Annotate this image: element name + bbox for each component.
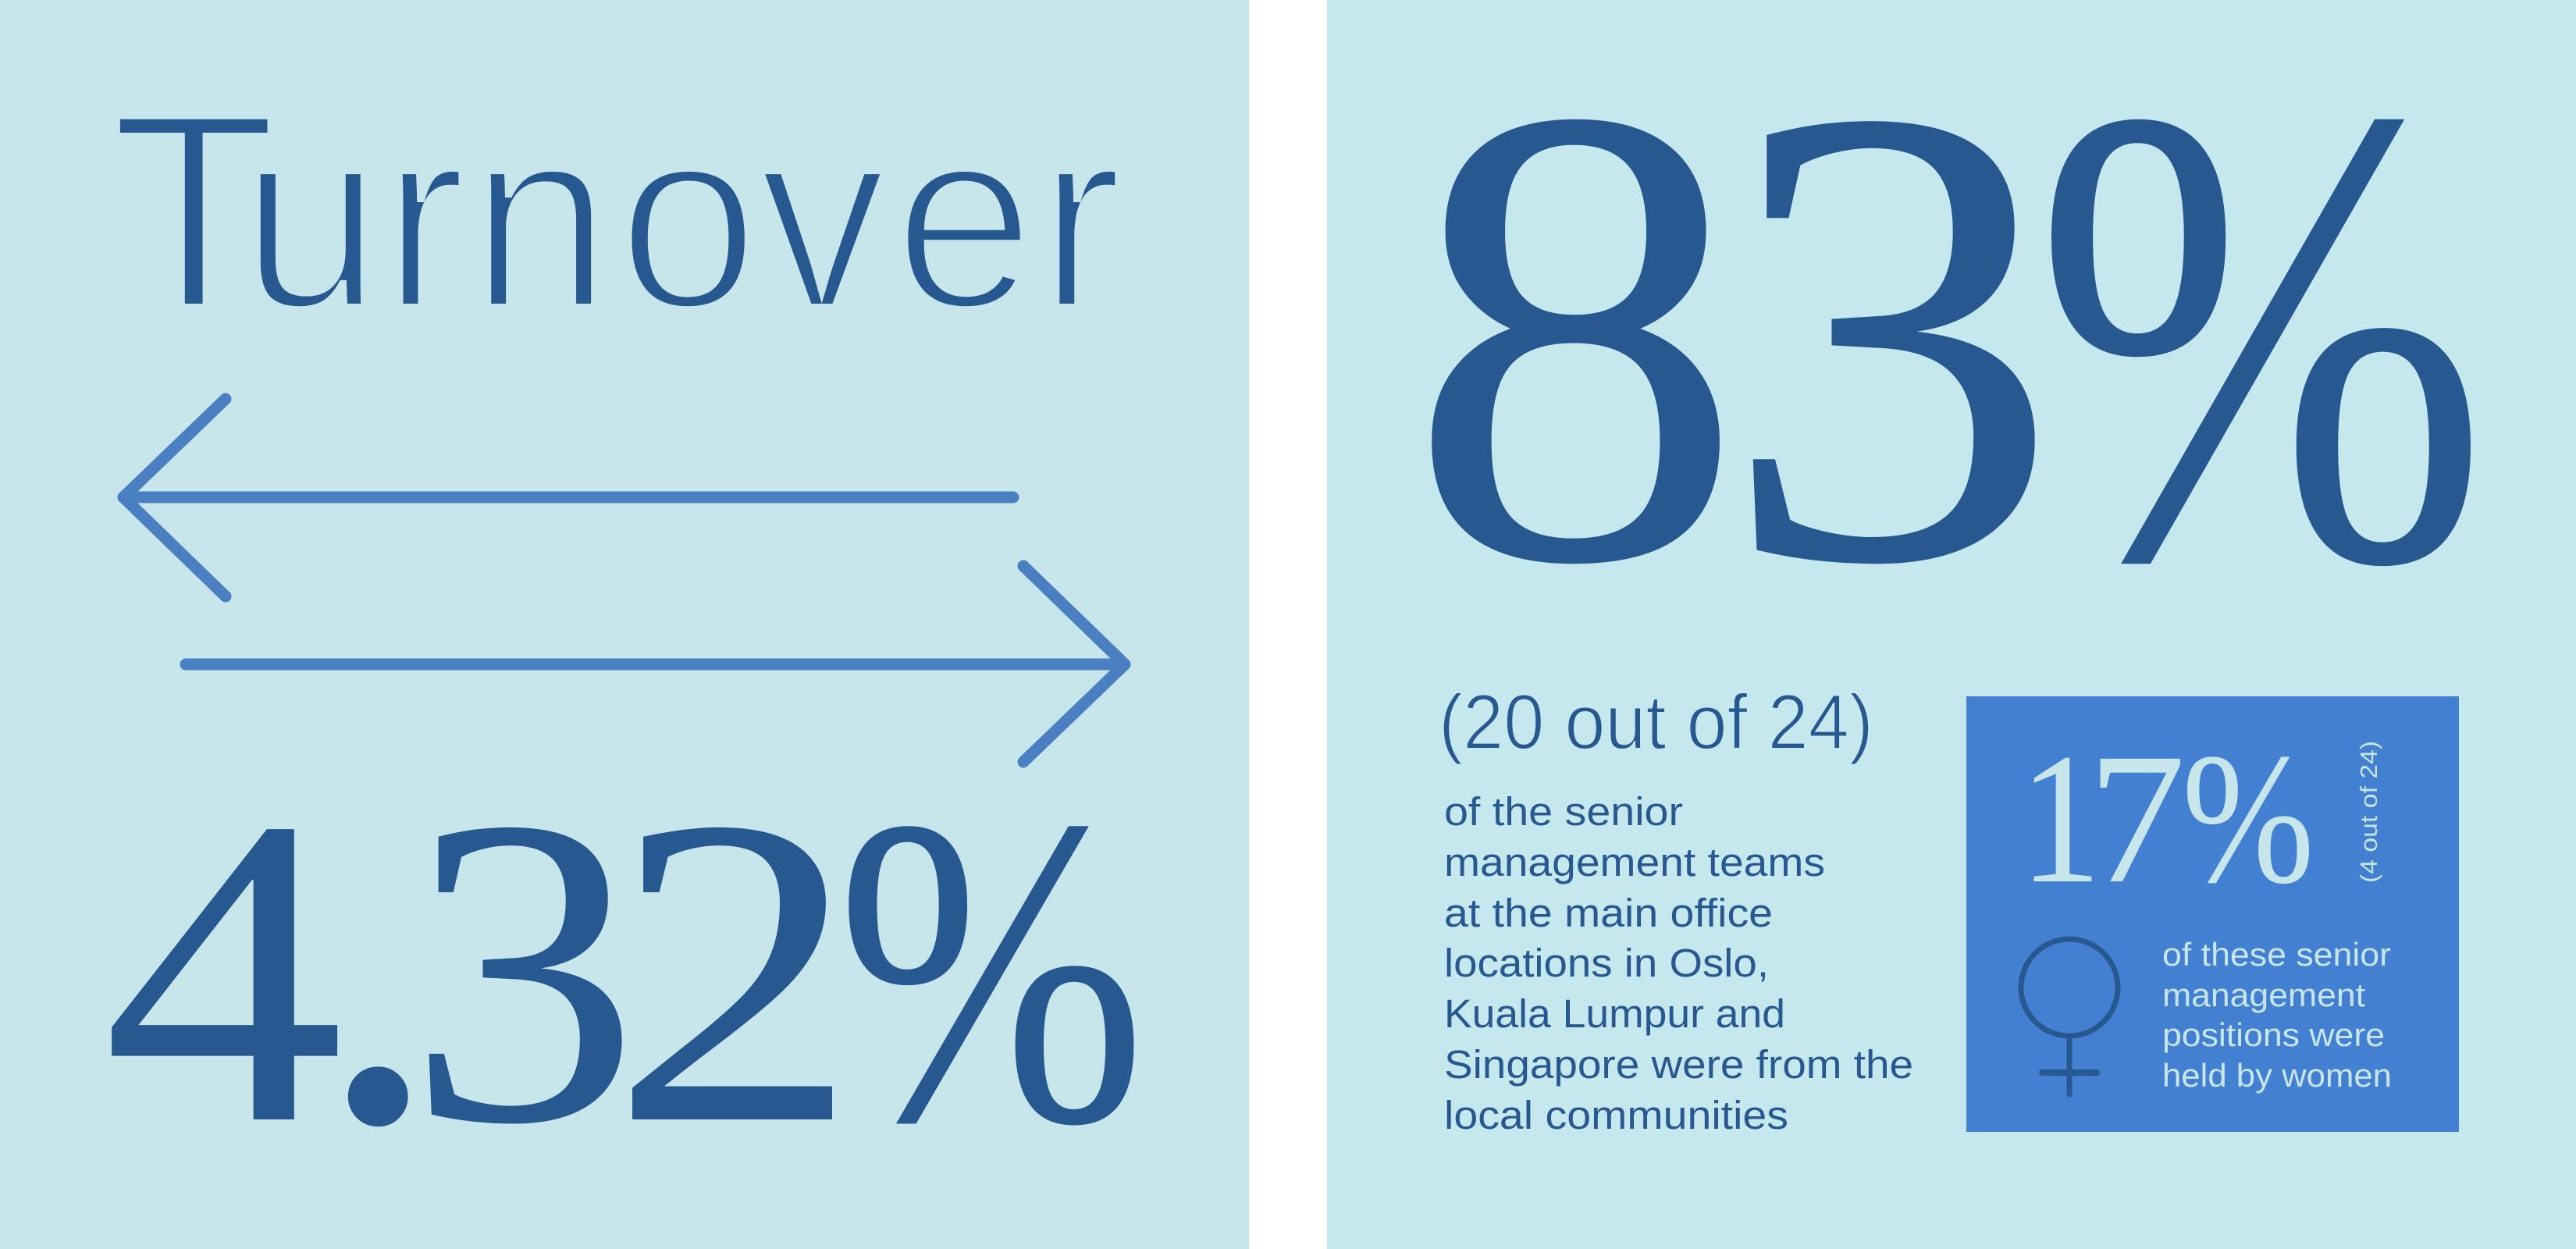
text: women description: positions were	[2162, 1016, 2385, 1053]
figure: 17%	[2019, 714, 2314, 923]
panel: turnover	[0, 0, 1249, 1249]
figure: 4.32%: 2	[610, 728, 859, 1215]
figure: 4.32%: .	[315, 667, 441, 1229]
heading: Turnover: T	[110, 55, 277, 368]
text: women description	[2162, 936, 2392, 1094]
heading: Turnover: urnover	[240, 73, 1123, 363]
figure: 17%: 1	[2019, 714, 2101, 922]
text: 4 out of 24: (4 out of 24)	[2355, 741, 2382, 883]
text: women description: held by women	[2162, 1057, 2392, 1094]
text: 20 out of 24: (20 out of 24)	[1439, 678, 1873, 765]
text: women description: of these senior	[2162, 936, 2391, 973]
figure: 17%: 7	[2087, 715, 2186, 923]
text: senior management description: of the senior	[1444, 789, 1683, 834]
figure: 4.32%: 3	[407, 727, 640, 1215]
text: women description: management	[2162, 977, 2365, 1013]
text: senior management description: at the main office	[1444, 891, 1773, 935]
figure: 4.32%: 4	[102, 728, 345, 1215]
text: senior management description: Kuala Lumpur and	[1444, 991, 1785, 1036]
panel: senior management	[1327, 0, 2576, 1249]
panel: women in management	[1966, 696, 2459, 1132]
text: senior management description: local communities	[1444, 1093, 1788, 1137]
figure: 4.32%	[102, 667, 1147, 1229]
text: senior management description: locations in Oslo,	[1444, 941, 1769, 985]
icon: right arrow	[186, 566, 1125, 762]
text: senior management description: Singapore were from the	[1444, 1042, 1913, 1087]
text: senior management description	[1444, 789, 1913, 1137]
icon: left arrow	[123, 399, 1013, 596]
text: senior management description: management teams	[1444, 840, 1825, 884]
figure: 4.32%: %	[836, 728, 1147, 1215]
figure: 17%: %	[2182, 716, 2314, 923]
icon: female symbol	[2021, 939, 2118, 1094]
figure: 83%	[1406, 0, 2489, 700]
